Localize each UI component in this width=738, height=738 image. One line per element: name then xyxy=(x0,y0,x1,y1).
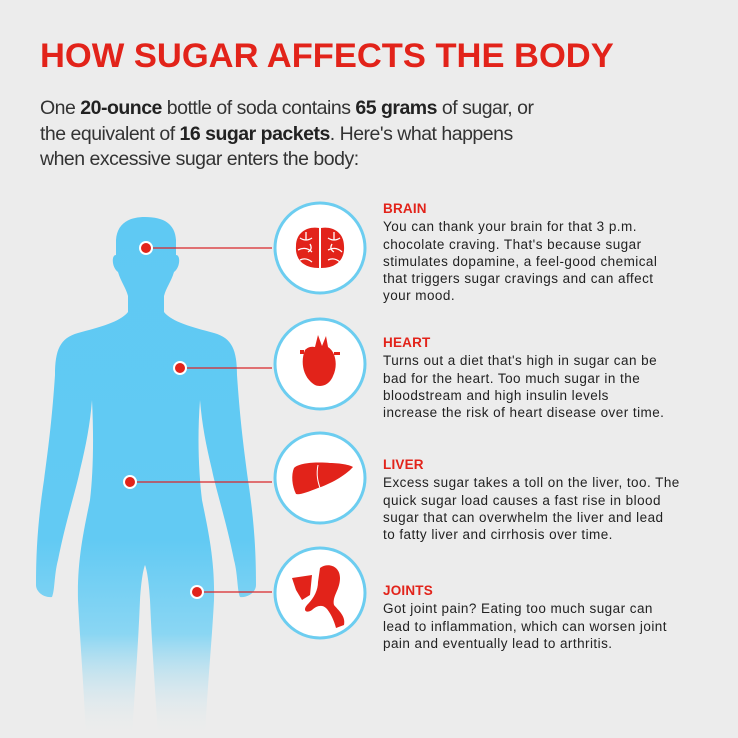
section: brain: your mood. xyxy=(383,288,455,303)
section: liver xyxy=(383,457,680,542)
body figure xyxy=(36,217,256,738)
section: heart: Turns out a diet that's high in sugar can be xyxy=(383,353,657,368)
section: brain: BRAIN xyxy=(383,201,427,216)
icon: joints xyxy=(292,565,344,628)
section: liver: Excess sugar takes a toll on the liver, too. The xyxy=(383,475,680,490)
section: heart: bad for the heart. Too much sugar in the xyxy=(383,371,640,386)
section: liver: to fatty liver and cirrhosis over time. xyxy=(383,527,613,542)
title: HOW SUGAR AFFECTS THE BODY xyxy=(40,37,614,75)
section: joints: JOINTS xyxy=(383,583,433,598)
section: heart: HEART xyxy=(383,335,430,350)
section: brain xyxy=(383,201,657,303)
section: brain: stimulates dopamine, a feel-good chemical xyxy=(383,254,657,269)
subtitle: when excessive sugar enters the body: xyxy=(40,148,359,170)
section: brain: that triggers sugar cravings and can affect xyxy=(383,271,654,286)
section: liver: LIVER xyxy=(383,457,424,472)
section: joints: Got joint pain? Eating too much sugar can xyxy=(383,601,653,616)
marker dots xyxy=(124,242,203,598)
icon: liver xyxy=(292,463,353,494)
section: brain: chocolate craving. That's because sugar xyxy=(383,237,642,252)
subtitle: One 20-ounce bottle of soda contains 65 grams of sugar, or xyxy=(40,97,533,119)
section: joints: pain and eventually lead to arthritis. xyxy=(383,636,612,651)
icon: heart xyxy=(300,335,340,386)
subtitle xyxy=(40,97,534,170)
connector lines xyxy=(130,248,272,592)
section: joints xyxy=(383,583,667,651)
icon circles xyxy=(275,203,365,638)
section: liver: sugar that can overwhelm the liver and lead xyxy=(383,510,664,525)
section: heart: bloodstream and high insulin levels xyxy=(383,388,609,403)
section: heart xyxy=(383,335,664,420)
icon: brain xyxy=(296,228,344,268)
section: brain: You can thank your brain for that 3 p.m. xyxy=(383,219,637,234)
section: joints: lead to inflammation, which can worsen joint xyxy=(383,619,667,634)
section: liver: quick sugar load causes a fast rise in blood xyxy=(383,493,661,508)
subtitle: the equivalent of 16 sugar packets. Here's what happens xyxy=(40,122,513,144)
section: heart: increase the risk of heart disease over time. xyxy=(383,405,664,420)
